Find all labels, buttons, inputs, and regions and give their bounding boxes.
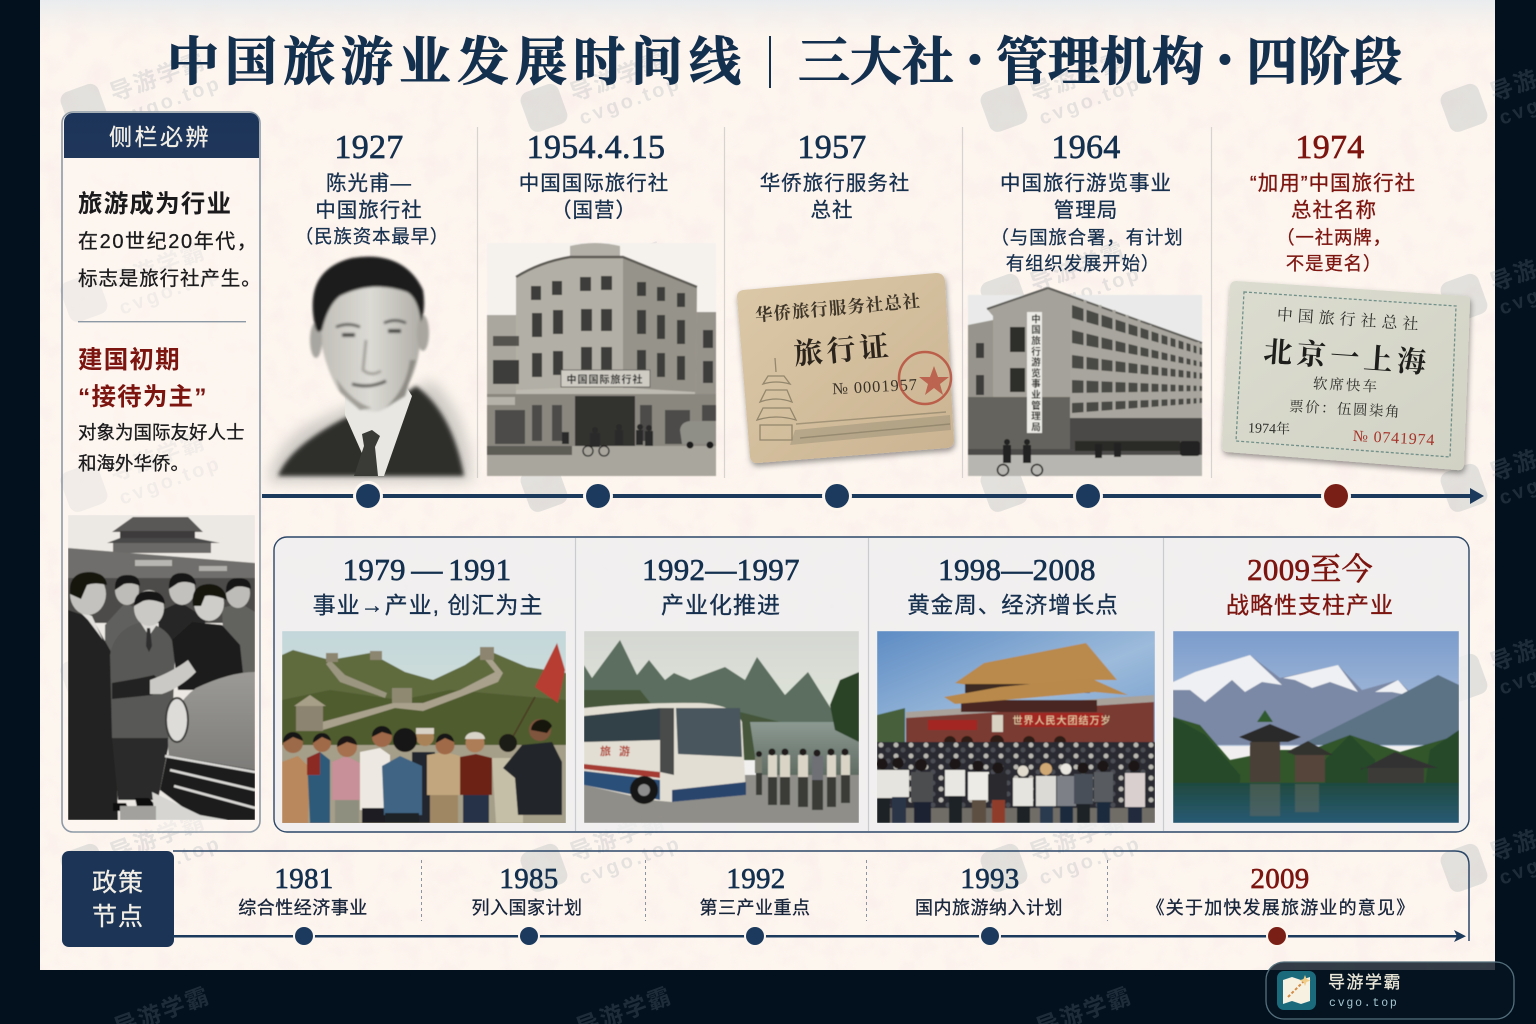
milestone 1957: 1957 — [797, 129, 867, 166]
policy 2009 — [1147, 863, 1415, 918]
watermarks: 导游学霸 — [1026, 47, 1129, 106]
watermarks: 导游学霸 — [566, 47, 669, 106]
milestone 1927: 中国旅行社 — [315, 199, 423, 222]
text block: reception focus in early PRC: 建国初期 — [78, 346, 181, 374]
watermarks: 导游学霸 — [106, 237, 209, 296]
photo: tour bus at karst river — [584, 631, 859, 823]
ticket: overseas Chinese travel permit — [737, 273, 954, 463]
policy heading block: 政策 — [92, 869, 144, 897]
milestone 1974: 不是更名） — [1286, 253, 1382, 274]
crowd front row figures — [876, 758, 1145, 823]
title: 三大社 — [798, 35, 954, 92]
milestone 1957: 总社 — [810, 199, 854, 222]
milestone 1954.4.15 — [487, 129, 716, 476]
policy 1985: 1985 — [499, 863, 559, 895]
milestone 1964: 管理局 — [1054, 199, 1118, 222]
brand badge — [1266, 962, 1514, 1019]
watermarks: 导游学霸 — [106, 47, 209, 106]
text block: tourism becomes an industry: 在20世纪20年代， — [78, 230, 258, 253]
policy 2009: 2009 — [1250, 863, 1310, 895]
left man — [68, 610, 119, 820]
milestone 1954.4.15: 1954.4.15 — [527, 129, 665, 166]
ticket: Beijing to Shanghai train ticket: 软席快车 — [1313, 375, 1379, 396]
ticket: Beijing to Shanghai train ticket: 1974年 — [1248, 419, 1290, 438]
watermarks: 导游学霸 — [1026, 237, 1129, 296]
title: · — [1215, 26, 1235, 94]
stage 2009 to present: 2009至今 — [1247, 552, 1373, 587]
policy 1993: 1993 — [960, 863, 1020, 895]
policy 1992 — [700, 863, 810, 918]
milestone 1954.4.15: （国营） — [551, 199, 637, 222]
text block: tourism becomes an industry — [78, 190, 262, 290]
center man — [110, 622, 175, 738]
policy heading block — [62, 851, 174, 947]
watermarks: cvgo.top — [576, 262, 685, 320]
photo: tourism administration building — [968, 288, 1202, 476]
woman in dark jacket — [172, 622, 243, 690]
ticket: Beijing to Shanghai train ticket: 中国旅行社总社 — [1276, 306, 1424, 334]
policy 1993: 国内旅游纳入计划 — [915, 898, 1063, 918]
main timeline with arrow — [262, 481, 1484, 511]
ticket: Beijing to Shanghai train ticket: 票价：伍圆柒角 — [1289, 398, 1401, 421]
temple engraving on ticket — [757, 358, 796, 440]
photo: CITS building: 中国国际旅行社 — [566, 373, 644, 386]
sidebar heading — [64, 113, 259, 158]
photo: Great Wall tour group — [282, 631, 566, 825]
back men — [104, 605, 140, 652]
ticket: overseas Chinese travel permit: 华侨旅行服务社总社 — [754, 291, 922, 325]
title: 四阶段 — [1246, 35, 1402, 92]
watermarks: cvgo.top — [576, 832, 685, 890]
policy 1992: 第三产业重点 — [700, 898, 810, 918]
stage 1992-1997: 产业化推进 — [661, 592, 781, 618]
watermarks: cvgo.top — [116, 262, 225, 320]
milestone 1974: 1974 — [1295, 129, 1365, 166]
watermarks: cvgo.top — [116, 452, 225, 510]
stage 1998-2008: 黄金周、经济增长点 — [907, 593, 1119, 618]
text block: reception focus in early PRC: 对象为国际友好人士 — [78, 422, 245, 443]
column dividers — [478, 127, 1212, 478]
stage 1979-1991: 1979 — 1991 — [343, 552, 511, 587]
ticket: Beijing to Shanghai train ticket: № 0741974 — [1352, 428, 1436, 449]
text block: reception focus in early PRC: “接待为主” — [78, 383, 208, 411]
milestone 1964: 有组织发展开始） — [1006, 253, 1160, 274]
milestone 1957: 华侨旅行服务社 — [760, 172, 910, 195]
watermarks: cvgo.top — [1036, 832, 1145, 890]
stage 1979-1991 — [282, 552, 566, 825]
milestone 1964: （与国旅合署，有计划 — [990, 227, 1184, 248]
photo: Tiananmen golden week crowd — [876, 631, 1155, 823]
text block: reception focus in early PRC: 和海外华侨。 — [78, 453, 189, 474]
photo: snow mountains and lakeside pavilion — [1173, 631, 1459, 823]
milestone 1974: （一社两牌， — [1276, 227, 1392, 248]
milestone 1954.4.15: 中国国际旅行社 — [519, 172, 669, 195]
policy 1981: 1981 — [274, 863, 334, 895]
milestone 1927: 1927 — [334, 129, 404, 166]
tourists by the bus — [755, 748, 850, 810]
milestone 1957 — [737, 129, 954, 463]
stage 1992-1997 — [584, 552, 859, 823]
sidebar heading: 侧栏必辨 — [109, 124, 211, 150]
watermarks: cvgo.top — [116, 832, 225, 890]
photo: welcoming guests before Tiananmen — [68, 515, 255, 820]
milestone 1974 — [1222, 129, 1470, 470]
photo: portrait of Chen Guangfu — [268, 257, 472, 482]
photo: tourism administration building: 中国旅行游览事业管理局 — [1029, 313, 1041, 433]
panel: four stages — [274, 537, 1469, 832]
watermarks: 导游学霸 — [1026, 807, 1129, 866]
watermarks: cvgo.top — [1036, 72, 1145, 130]
watermarks: 导游学霸 — [566, 807, 669, 866]
policy 1981 — [238, 863, 368, 918]
policy 1993 — [915, 863, 1063, 918]
ticket: overseas Chinese travel permit: 旅行证 — [792, 330, 894, 371]
milestone 1927: 陈光甫— — [326, 172, 412, 195]
watermarks: 导游学霸 — [566, 237, 669, 296]
watermarks: 导游学霸 — [106, 807, 209, 866]
title — [167, 26, 1402, 94]
policy 1992: 1992 — [726, 863, 786, 895]
milestone 1974: 总社名称 — [1291, 199, 1377, 222]
watermarks: 导游学霸 — [106, 427, 209, 486]
tour bus: 旅游 — [600, 744, 638, 758]
stage 1992-1997: 1992—1997 — [642, 552, 800, 587]
stage 1979-1991: 事业→产业, 创汇为主 — [313, 592, 543, 618]
clasped hands — [112, 675, 164, 699]
brand badge: cvgo.top — [1329, 997, 1399, 1010]
stage 1998-2008: 1998—2008 — [938, 552, 1096, 587]
text block: tourism becomes an industry: 旅游成为行业 — [78, 190, 232, 218]
text block: tourism becomes an industry: 标志是旅行社产生。 — [78, 268, 262, 290]
ticket: Beijing to Shanghai train ticket: 北京一上海 — [1262, 335, 1432, 380]
stage 2009 to present — [1173, 552, 1459, 823]
title: · — [965, 26, 985, 94]
milestone 1964: 中国旅行游览事业 — [1000, 172, 1172, 195]
milestone 1964: 1964 — [1051, 129, 1121, 166]
watermarks: cvgo.top — [576, 72, 685, 130]
milestone 1974: “加用”中国旅行社 — [1250, 172, 1416, 195]
car — [167, 672, 255, 770]
policy 1981: 综合性经济事业 — [238, 898, 368, 918]
title: 管理机构 — [996, 34, 1204, 92]
policy 2009: 《关于加快发展旅游业的意见》 — [1147, 898, 1415, 918]
ticket: Beijing to Shanghai train ticket — [1222, 281, 1470, 470]
icon: map logo — [1277, 971, 1316, 1010]
watermarks: cvgo.top — [1036, 262, 1145, 320]
panel: policy nodes — [62, 851, 1469, 947]
tour group people — [282, 719, 562, 823]
watermarks: cvgo.top — [116, 72, 225, 130]
policy 1985: 列入国家计划 — [472, 898, 582, 918]
text block: reception focus in early PRC — [78, 346, 245, 474]
policy 1985 — [472, 863, 582, 918]
milestone 1964 — [968, 129, 1202, 476]
milestone 1927: （民族资本最早） — [295, 226, 449, 247]
stage 1998-2008 — [876, 552, 1155, 823]
policy timeline with arrow — [173, 925, 1466, 947]
stage 2009 to present: 战略性支柱产业 — [1226, 592, 1394, 618]
photo: CITS building — [487, 243, 716, 476]
milestone 1927 — [268, 129, 472, 482]
brand badge: 导游学霸 — [1328, 973, 1402, 992]
panel: sidebar — [62, 112, 262, 832]
policy heading block: 节点 — [92, 903, 144, 931]
title: 中国旅游业发展时间线 — [167, 34, 747, 92]
tour bus — [584, 703, 746, 804]
ticket: overseas Chinese travel permit: № 0001957 — [832, 375, 918, 398]
photo: Tiananmen golden week crowd: 世界人民大团结万岁 — [1012, 714, 1112, 727]
